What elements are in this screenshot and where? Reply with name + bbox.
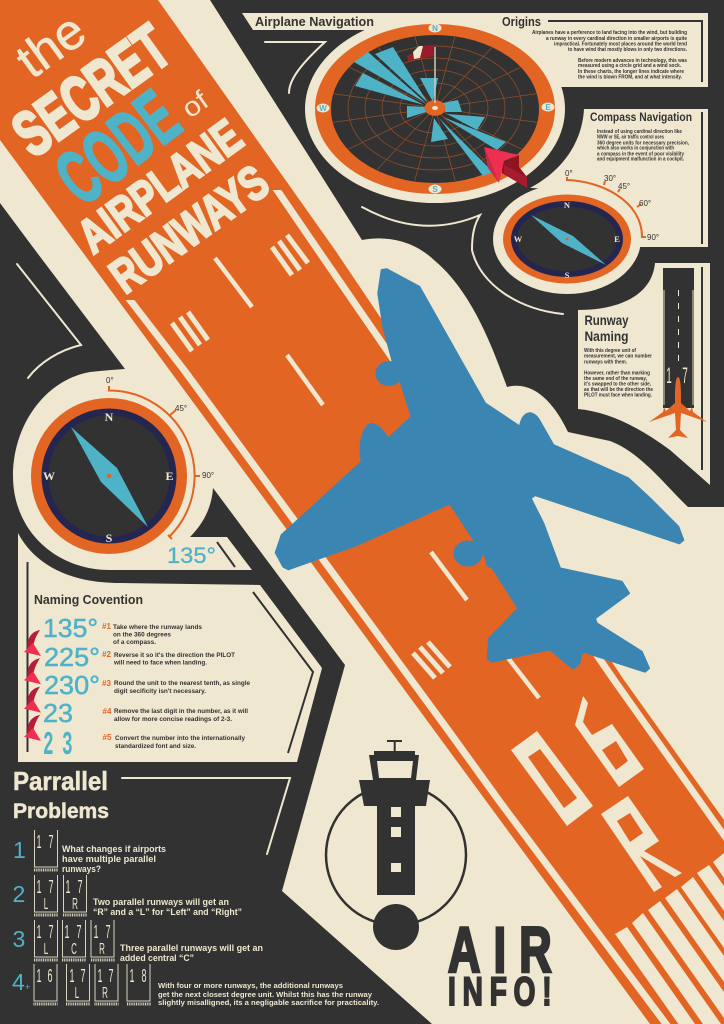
panel: origins: impractical. Fortunately most places around the world tend <box>554 42 687 48</box>
row numbers: 1 <box>13 837 26 863</box>
parallel runway icons: 1 <box>36 967 42 987</box>
panel: runway naming <box>578 263 710 485</box>
panel: runway naming: Naming <box>584 328 628 344</box>
big compass: S <box>106 531 113 545</box>
convention step text: standardized font and size. <box>115 743 196 750</box>
parallel runway icons: 1 <box>69 967 75 987</box>
plane silhouette <box>276 269 683 672</box>
heading: parallel problems: Problems <box>13 800 109 823</box>
big compass degree scale: 45° <box>175 404 187 413</box>
icon: small orange plane <box>649 377 707 438</box>
parallel runway text: have multiple parallel <box>62 854 156 864</box>
panel: compass navigation: 360 degree units for necessary precision, <box>597 140 689 146</box>
small compass <box>503 169 659 284</box>
convention step text: allow for more concise readings of 2-3. <box>114 716 232 723</box>
panel: compass navigation: Instead of using cardinal direction like <box>597 129 682 135</box>
parallel runway icons: 6 <box>47 967 53 987</box>
title: RUNWAYS <box>101 156 279 304</box>
big compass: N <box>105 410 114 424</box>
parallel runway text: slightly misalligned, its a negligable sacrifice for practicality. <box>158 998 379 1007</box>
small compass degree scale: 0° <box>565 169 573 178</box>
convention step text: Take where the runway lands <box>113 624 203 631</box>
title <box>0 2 279 304</box>
parallel runway icons: C <box>71 940 77 958</box>
parallel runway icons: 7 <box>48 833 54 853</box>
panel: runway naming: the same end of the runway, <box>584 376 647 382</box>
convention numbers <box>43 615 100 764</box>
parallel runway text <box>62 844 379 1007</box>
convention step numbers: #4 <box>102 707 112 716</box>
panel: origins: Before modern advances in technology, this was <box>578 58 687 64</box>
big compass: W <box>43 469 55 483</box>
parallel runway icons: 7 <box>48 923 54 943</box>
convention step text <box>113 624 251 750</box>
small compass degree scale <box>565 169 659 242</box>
small compass degree scale: 30° <box>604 174 616 183</box>
parallel runway icons: 7 <box>48 878 54 898</box>
convention step numbers: #3 <box>102 679 111 688</box>
panel: origins: In these charts, the longer lines indicate where <box>578 69 684 75</box>
row numbers: + <box>25 982 30 992</box>
title: CODE <box>40 74 195 221</box>
panel: origins: to have wind that mostly blows in only two directions. <box>568 47 687 53</box>
logo: air info: AIR <box>448 914 552 986</box>
title: the <box>6 2 96 89</box>
convention numbers: 3 <box>62 727 73 764</box>
small compass: W <box>514 234 523 244</box>
parallel runway icons: R <box>102 984 108 1002</box>
row numbers <box>12 837 30 995</box>
parallel runway text: runways? <box>62 864 101 874</box>
small compass degree scale: 90° <box>647 233 659 242</box>
parallel runway icons: 7 <box>77 878 83 898</box>
icon: control tower <box>326 740 466 950</box>
parallel runway text: Two parallel runways will get an <box>93 897 229 907</box>
big compass degree scale <box>106 376 214 539</box>
convention numbers: 135° <box>43 615 98 643</box>
parallel runway icons: 1 <box>36 878 42 898</box>
convention step numbers: #1 <box>102 622 111 631</box>
big compass degree scale: 90° <box>202 471 214 480</box>
parallel runway text: added central “C” <box>120 953 194 963</box>
convention numbers: 230° <box>44 672 100 700</box>
big compass: E <box>165 469 174 483</box>
logo: air info: INFO! <box>448 970 552 1014</box>
parallel runway icons: 1 <box>36 923 42 943</box>
panel: runway naming: as that will be the direction the <box>584 387 653 393</box>
convention step numbers <box>102 622 112 742</box>
parallel runway icons: L <box>75 984 79 1002</box>
parallel runway icons: 7 <box>76 923 82 943</box>
convention numbers: 2 <box>43 727 54 764</box>
parallel runway icons: 1 <box>64 923 70 943</box>
parallel runway text: What changes if airports <box>62 844 166 854</box>
panel: compass navigation <box>493 109 708 294</box>
parallel runway text: Three parallel runways will get an <box>120 943 263 953</box>
big compass degree scale: 0° <box>106 376 114 385</box>
panel: compass navigation: Compass Navigation <box>590 110 692 124</box>
wind arrow <box>484 147 527 188</box>
panel: airplane navigation header <box>242 13 708 203</box>
row numbers: 2 <box>12 881 25 907</box>
decorative cream strokes <box>17 42 563 854</box>
parallel runway icons: L <box>44 895 48 913</box>
panel: origins: Origins <box>502 15 541 29</box>
panel: runway naming: However, rather than marking <box>584 370 650 376</box>
curved red arrows <box>24 630 41 741</box>
parallel runway icons: 1 <box>65 878 71 898</box>
convention step text: on the 360 degrees <box>113 632 172 638</box>
convention step text: Round the unit to the nearest tenth, as single <box>114 680 251 687</box>
big compass <box>31 376 216 568</box>
parallel runway icons: L <box>44 940 48 958</box>
panel: compass navigation: and equipment malfunction in a cockpit. <box>597 157 684 163</box>
runway illustration: 7 <box>682 364 688 388</box>
title: AIRPLANE <box>68 110 252 264</box>
parallel runway icons: R <box>99 940 105 958</box>
cardinal markers: W <box>319 104 327 113</box>
small compass: E <box>614 234 620 244</box>
cardinal markers: E <box>545 103 551 112</box>
cardinal markers: N <box>432 24 438 33</box>
parallel runway icons: 7 <box>108 967 114 987</box>
convention numbers: 23 <box>43 700 73 728</box>
convention step text: Reverse it so it's the direction the PILOT <box>114 652 235 659</box>
convention step text: will need to face when landing. <box>113 660 207 666</box>
runway illustration <box>663 268 694 408</box>
panel: runway naming: it's swapped to the other side, <box>584 381 651 387</box>
panel: origins: Airplanes have a perference to land facing into the wind, but building <box>532 30 687 36</box>
panel: runway naming: Runway <box>584 312 629 328</box>
row numbers: 3 <box>12 926 25 952</box>
title: of <box>176 85 214 124</box>
windsock <box>407 45 435 103</box>
panel: naming convention: Naming Covention <box>34 593 143 607</box>
small compass degree scale: 60° <box>639 199 651 208</box>
panel: runway naming: With this degree unit of <box>584 348 636 354</box>
convention step text: of a compass. <box>113 639 156 646</box>
panel: compass navigation: which also works in conjunction with <box>596 146 674 152</box>
parallel runway icons: 8 <box>141 967 147 987</box>
small compass degree scale: 45° <box>618 182 630 191</box>
convention step numbers: #2 <box>102 650 111 659</box>
small compass: S <box>565 270 570 280</box>
panel: runway naming: runways with them. <box>584 359 627 365</box>
parallel runway text: get the next closest degree unit. Whilst this has the runway <box>158 990 373 999</box>
heading: parallel problems: Parrallel <box>13 766 108 796</box>
convention numbers: 225° <box>44 644 100 672</box>
convention step text: Remove the last digit in the number, as it will <box>114 708 248 715</box>
convention step text: digit secificity isn't necessary. <box>114 688 206 695</box>
parallel runway icons: 1 <box>129 967 135 987</box>
parallel runway icons <box>34 830 151 1004</box>
big compass: 135° <box>167 543 216 568</box>
runway illustration: 1 <box>666 364 672 388</box>
panel: runway naming: PILOT must face when landing. <box>584 393 652 399</box>
parallel runway icons: 7 <box>105 923 111 943</box>
panel: airplane navigation header: Airplane Navigation <box>255 15 374 29</box>
wind rose compass <box>315 24 555 194</box>
parallel runway text: With four or more runways, the additional runways <box>158 981 343 990</box>
parallel runway icons: 1 <box>36 833 42 853</box>
panel: compass navigation: a compass in the event of poor visibility <box>597 151 685 157</box>
panel: origins: the wind is blown FROM, and at what intensity. <box>578 74 682 80</box>
panel: origins: a runway in every cardinal direction in smaller airports is quite <box>546 36 687 42</box>
heading: parallel problems <box>13 766 109 823</box>
panel: origins: measured using a circle grid and a wind sock. <box>578 63 681 69</box>
panel: runway naming: measurement, we can number <box>584 354 653 360</box>
panel: compass navigation: NWW or SE, air traffic control uses <box>597 135 664 141</box>
cardinal markers <box>316 24 554 194</box>
row numbers: 4 <box>12 969 25 995</box>
convention step numbers: #5 <box>102 733 112 742</box>
parallel runway text: “R” and a “L” for “Left” and “Right” <box>93 907 242 917</box>
cardinal markers: S <box>432 185 438 194</box>
small compass: N <box>564 200 571 210</box>
parallel runway icons: 1 <box>93 923 99 943</box>
panel: naming convention <box>18 533 322 764</box>
parallel runway icons: R <box>72 895 78 913</box>
parallel runway icons: 1 <box>97 967 103 987</box>
panel: origins <box>502 15 702 82</box>
parallel runway icons: 7 <box>80 967 86 987</box>
convention step text: Convert the number into the internationally <box>115 735 246 742</box>
